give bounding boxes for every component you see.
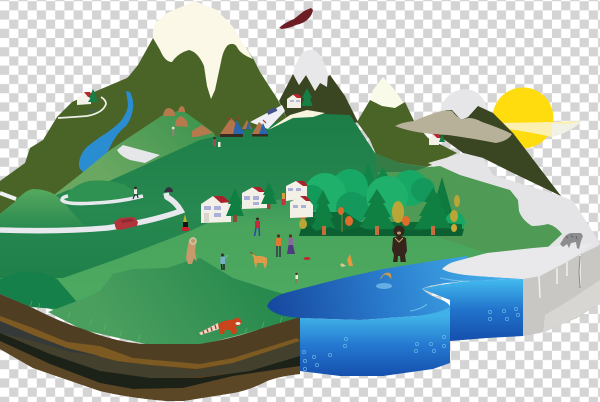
animal: bear <box>392 226 407 262</box>
soil cross-section <box>0 294 300 401</box>
soil top layer <box>0 294 300 401</box>
house one <box>201 196 231 223</box>
snow shelf by lake <box>442 243 593 279</box>
road patch on knoll <box>117 145 160 163</box>
person in blue <box>220 254 228 270</box>
animal: fox and cub <box>340 254 353 267</box>
winding road upper loop <box>62 196 143 204</box>
house four <box>290 196 313 218</box>
bus road on ridge <box>250 105 285 129</box>
huts on knoll <box>163 106 213 137</box>
red fish on lawn <box>304 257 310 260</box>
house three <box>286 181 308 201</box>
air bubbles in water <box>302 307 520 371</box>
animal: deer <box>250 252 267 269</box>
ripples on lake <box>410 278 470 311</box>
mountain: centre dark peak with snow <box>279 50 358 130</box>
villagers near long houses <box>213 137 220 147</box>
soil black layer <box>0 333 300 389</box>
dark left mound <box>0 272 77 309</box>
runner on upper road <box>133 187 138 199</box>
child on lawn <box>295 273 298 283</box>
forest trunks <box>322 226 435 235</box>
people on the green <box>182 193 298 283</box>
mountain-top house and pine <box>287 88 312 108</box>
forest <box>297 163 465 236</box>
lawn field <box>0 195 487 345</box>
hill: main green slope <box>0 113 420 300</box>
animal: red panda <box>199 318 241 335</box>
right-side house and pine <box>429 134 445 145</box>
knoll: upper light green slope <box>50 110 230 200</box>
hillside house and loop path <box>58 89 106 118</box>
village pine one <box>226 188 244 222</box>
animal: ram <box>186 238 197 264</box>
green slope beneath snow <box>377 157 562 262</box>
dark foot of olive mountain <box>375 153 427 172</box>
soil slate left layer <box>0 321 100 356</box>
village houses <box>201 181 313 223</box>
snowfield on right slope <box>428 153 600 285</box>
mountain: far right dark peak with snow <box>428 89 561 196</box>
animal: snow leopard <box>560 233 583 249</box>
soil orange seam <box>0 316 300 369</box>
person in purple <box>287 234 295 254</box>
forest front pines <box>309 188 452 232</box>
person in black and red <box>182 214 189 231</box>
river <box>79 91 133 172</box>
village of long houses <box>220 117 268 137</box>
grass tufts along edge <box>30 301 282 341</box>
fish leaping <box>376 273 392 289</box>
tunnel at road end <box>164 187 173 192</box>
lake front wall <box>300 307 450 376</box>
mountain snow cap: big peak <box>153 1 253 99</box>
road: cream strip on hilltop <box>268 110 325 130</box>
soil mid grey layer <box>0 320 300 380</box>
icon: eagle <box>279 8 313 29</box>
village pine two <box>261 182 277 209</box>
mid knoll <box>61 180 143 204</box>
mountain: olive peak with cream snow <box>357 77 457 167</box>
winding road lower <box>0 193 181 231</box>
forest undergrowth strip <box>299 226 464 236</box>
hiker on knoll <box>172 127 175 136</box>
ice cliff <box>523 245 600 336</box>
far-left knoll and road stub <box>0 189 90 232</box>
person in orange <box>276 234 281 257</box>
cloud band across peaks <box>395 110 512 143</box>
icon: red car <box>114 217 138 230</box>
icon: sun <box>492 88 583 148</box>
forest round trees <box>299 169 465 232</box>
front mound <box>48 258 300 345</box>
lake back wall <box>422 279 523 341</box>
autumn shrubs <box>297 195 460 232</box>
person in red <box>254 218 260 236</box>
mountain: big olive peak <box>0 20 290 214</box>
forest back pines <box>304 163 456 226</box>
forest understory shade <box>304 212 462 236</box>
lake surface <box>267 256 523 320</box>
soil bottom layer <box>0 341 300 401</box>
house two <box>242 187 267 209</box>
person with yellow top <box>282 193 286 205</box>
